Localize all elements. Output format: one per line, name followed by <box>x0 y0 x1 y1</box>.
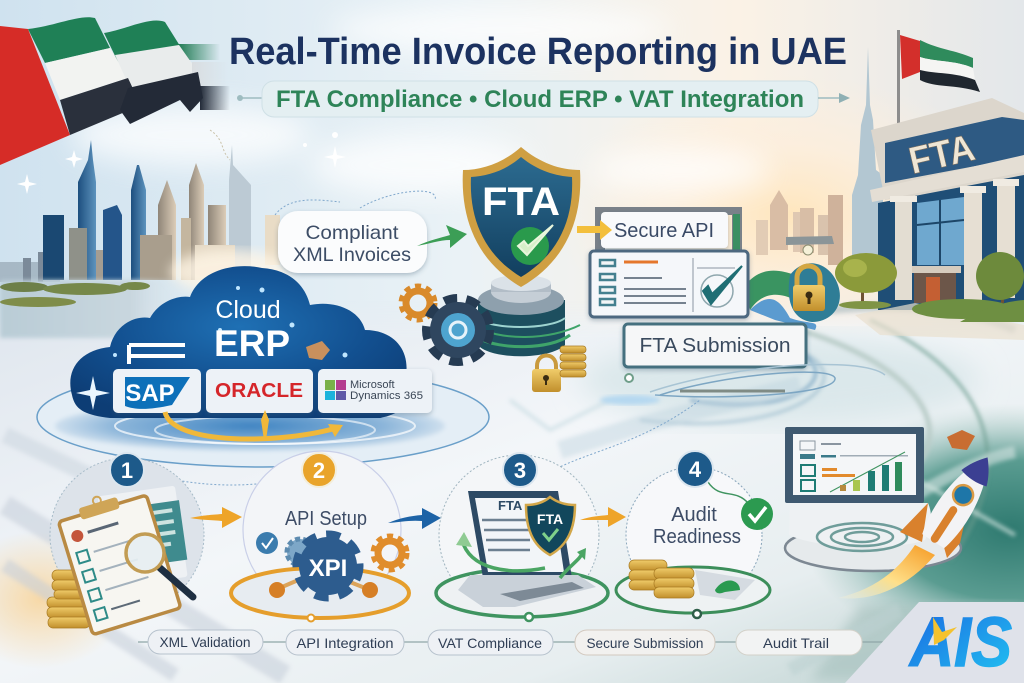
Microsoft Dynamics card: Microsoft <box>350 379 395 391</box>
pill: API Integration <box>286 630 404 655</box>
Microsoft Dynamics card: Dynamics 365 <box>350 390 423 402</box>
callout: Compliant XML Invoices <box>278 211 427 273</box>
step 2: API Setup <box>231 451 409 622</box>
badge 1 <box>110 453 144 487</box>
XPI gear <box>297 535 359 597</box>
cloud shape <box>70 266 410 418</box>
small shield icon <box>256 532 278 554</box>
spiral <box>817 523 907 551</box>
left skyline <box>0 140 280 282</box>
coins <box>47 570 90 628</box>
rocket wings <box>900 503 928 542</box>
arrow: step 2 to 3 <box>388 508 441 529</box>
arrow: yellow to Secure API <box>577 220 612 240</box>
badge 3 <box>503 453 537 487</box>
shield check <box>511 225 553 265</box>
badge 3: 3 <box>514 458 526 483</box>
pill: XML Validation <box>148 630 263 654</box>
background: sky <box>0 0 1024 340</box>
panel: invoice checklist <box>590 251 748 317</box>
green and blue lock blob <box>745 263 840 330</box>
callout: Compliant XML Invoices: Compliant <box>306 222 399 244</box>
laptop: growth dashboard <box>785 427 961 571</box>
FTA building <box>870 98 1024 310</box>
orange gear <box>373 536 407 570</box>
wrench handles <box>269 575 378 598</box>
step 1 circle <box>50 458 204 612</box>
small package <box>306 341 330 360</box>
Microsoft Dynamics card <box>318 369 432 413</box>
pill: VAT Compliance <box>428 630 553 655</box>
pill: Secure Submission <box>575 630 715 655</box>
yellow curved arrow <box>165 410 343 440</box>
bars glyph <box>129 345 185 364</box>
logo: AIS corner <box>845 602 1024 683</box>
subtitle banner <box>237 81 850 117</box>
background: grey teal lower right <box>810 606 1020 680</box>
panel: FTA Submission <box>624 324 806 367</box>
logo: AIS corner: AIS <box>908 603 1012 681</box>
cloud highlights <box>76 286 348 410</box>
step 4 circle <box>626 467 762 603</box>
ring <box>231 568 409 618</box>
step 3: FTA laptop <box>436 455 608 621</box>
pill: XML Validation: XML Validation <box>160 634 250 650</box>
small hanging sign <box>786 236 834 255</box>
panel: FTA Submission: FTA Submission <box>640 335 790 357</box>
document plate <box>695 570 755 600</box>
background: warm glow lower left <box>0 530 130 670</box>
badge 4: 4 <box>689 457 702 482</box>
pill: API Integration: API Integration <box>296 635 394 651</box>
connector node <box>625 374 633 382</box>
green sync arrows <box>462 540 583 578</box>
concentric swirl <box>650 364 885 397</box>
SAP card: SAP <box>125 380 175 407</box>
badge 4 <box>677 451 713 487</box>
badge 1: 1 <box>121 458 133 483</box>
background: sun glow <box>556 75 1024 355</box>
step 3 circle <box>439 455 599 615</box>
text: ERP: ERP <box>214 323 290 364</box>
XPI gear: XPI <box>309 555 347 582</box>
title: Real-Time Invoice Reporting in UAE <box>229 31 847 73</box>
shield: FTA <box>463 147 580 287</box>
arrow: green to shield <box>417 225 467 248</box>
panel: Secure API <box>595 207 742 254</box>
swirl platform under cloud <box>37 367 489 467</box>
subtitle banner: FTA Compliance • Cloud ERP • VAT Integration <box>276 86 804 113</box>
mini FTA shield: FTA <box>537 511 563 527</box>
rocket <box>838 448 1002 599</box>
step 4: Audit Readiness <box>616 467 773 618</box>
clipboard <box>55 483 181 635</box>
clouds haze <box>70 8 770 195</box>
green swoosh <box>715 581 740 593</box>
flag: rooftop UAE flag <box>897 30 980 127</box>
pill: Audit Trail: Audit Trail <box>763 635 829 651</box>
text: Readiness: Readiness <box>653 526 741 548</box>
FTA building sign: FTA <box>905 127 979 183</box>
flow network dashes <box>140 130 700 485</box>
background: pale mid ground tint <box>580 335 980 425</box>
magnifier <box>126 534 193 597</box>
process pills <box>138 630 885 655</box>
background: ground <box>0 300 1024 683</box>
trees and hedges <box>835 252 1024 322</box>
laptop <box>458 491 596 607</box>
pill: Secure Submission: Secure Submission <box>586 635 704 651</box>
orange gear <box>401 286 435 320</box>
step 2 circle <box>243 451 401 609</box>
arrow: step 1 to 2 <box>190 507 242 528</box>
background: swirling roads <box>5 307 1015 675</box>
shield text: FTA <box>482 180 560 224</box>
badge 2: 2 <box>313 458 325 483</box>
ring <box>616 567 770 613</box>
left shoreline and shrubs <box>0 280 190 338</box>
step 2 label: API Setup <box>285 508 367 530</box>
panel: Cloud ERP <box>70 266 432 440</box>
background: teal lower right <box>800 404 1024 683</box>
server stack <box>472 275 580 356</box>
SAP card <box>113 369 201 413</box>
pavement <box>855 303 1024 340</box>
ring <box>436 569 608 617</box>
small bright swirl <box>600 395 660 405</box>
pill: VAT Compliance: VAT Compliance <box>438 635 542 651</box>
skyline glow <box>170 250 290 294</box>
tower: Burj Khalifa <box>852 47 883 265</box>
sky decorations sparkle <box>17 132 346 194</box>
badge 2 <box>302 453 336 487</box>
pill: Audit Trail <box>736 630 862 655</box>
mini FTA shield <box>526 497 575 555</box>
flag: left UAE flag <box>0 17 230 165</box>
arrow: step 3 to 4 <box>580 507 626 527</box>
flying box <box>947 430 975 450</box>
coins <box>629 560 694 598</box>
right skyline <box>756 190 843 265</box>
rocket flame <box>838 545 935 599</box>
Oracle card <box>206 369 313 413</box>
text: Audit: Audit <box>671 504 717 526</box>
step 1 back document <box>98 485 190 588</box>
padlock <box>793 266 825 311</box>
panel: Secure API: Secure API <box>614 220 714 242</box>
green check <box>741 498 773 530</box>
laptop: FTA <box>498 498 523 513</box>
text: Cloud: Cloud <box>215 296 281 324</box>
small blue gear <box>287 539 313 565</box>
small padlock <box>532 356 561 392</box>
callout: Compliant XML Invoices: XML Invoices <box>293 245 411 266</box>
dark gear <box>427 299 489 361</box>
step 1: clipboard validation <box>47 458 204 635</box>
Oracle card: ORACLE <box>215 380 303 402</box>
connector <box>708 482 748 503</box>
small coin stack <box>560 346 586 377</box>
